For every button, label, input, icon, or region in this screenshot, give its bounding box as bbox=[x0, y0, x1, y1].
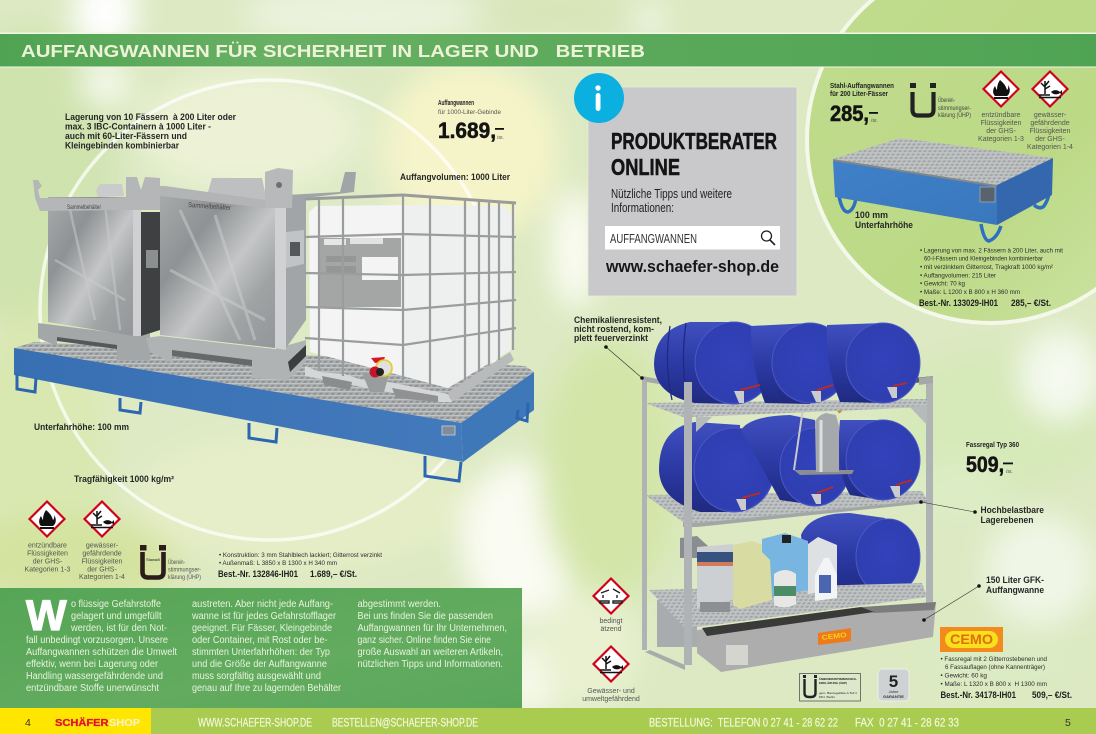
caption: corrosive: bedingt bbox=[600, 618, 623, 625]
rack front post bbox=[684, 382, 692, 665]
caption: environment hazard bbox=[582, 688, 640, 703]
CEMO tray label: CEMO bbox=[821, 632, 848, 642]
panel: product advisor online bbox=[574, 73, 797, 296]
white canister bbox=[808, 537, 837, 594]
leader: GFK tray: Auffangwanne bbox=[986, 585, 1044, 595]
container one body: Sammelbehälter bbox=[67, 205, 101, 211]
caption: water hazard left bbox=[79, 542, 125, 581]
caption: flammable left: Kategorien 1-3 bbox=[25, 566, 71, 574]
leader: corrosion resistant: nicht rostend, kom- bbox=[574, 324, 654, 334]
price: drum rack: 509, bbox=[966, 452, 1004, 477]
text block: spec left: • Außenmaß: L 3850 x B 1300 x H 340 mm bbox=[219, 560, 337, 567]
IBC valve bbox=[362, 357, 392, 392]
icon: conformity box: DIN, Berlin bbox=[819, 695, 835, 699]
text column two: geeignet. Für Fässer, Kleingebinde bbox=[192, 623, 332, 634]
middle shelf bbox=[645, 491, 927, 523]
text column one: o flüssige Gefahrstoffe bbox=[71, 599, 161, 610]
advisor url: www.schaefer-shop.de bbox=[605, 257, 779, 276]
text column one: fall unbedingt vorzusorgen. Unsere bbox=[26, 635, 168, 646]
icon: CEMO logo: CEMO bbox=[950, 631, 993, 647]
text block: spec drum rack: Best.-Nr. 34178-IH01 bbox=[940, 690, 1016, 700]
search box bbox=[605, 226, 780, 250]
icon: five year warranty bbox=[878, 669, 909, 701]
caption: flammable left: Flüssigkeiten bbox=[27, 550, 68, 558]
text block: spec left: 1.689,– €/St. bbox=[310, 569, 357, 579]
icon: conformity box: ERKLÄRUNG (ÜHP) bbox=[819, 680, 847, 685]
middle row drums bbox=[659, 415, 920, 512]
caption: water hazard right: gefährdende bbox=[1030, 120, 1070, 127]
icon: five year warranty: Jahre bbox=[888, 689, 899, 694]
drop cap: W bbox=[26, 592, 67, 640]
text block: storage capacity: Kleingebinden kombinierbar bbox=[65, 140, 179, 150]
caption: water hazard right: Kategorien 1-4 bbox=[1027, 144, 1073, 151]
IBC pallet bbox=[305, 366, 452, 402]
oil can on holder bbox=[794, 404, 854, 475]
text block: storage capacity: auch mit 60-Liter-Fässern und bbox=[65, 131, 187, 141]
CEMO tray label bbox=[818, 628, 851, 645]
leader: GFK tray bbox=[922, 575, 1044, 622]
icon: conformity mark right: Überein- bbox=[938, 97, 955, 104]
logo: Schäfer Shop: SHOP bbox=[109, 717, 140, 729]
text block: storage capacity: max. 3 IBC-Containern à 1000 Liter - bbox=[65, 122, 211, 132]
text column two: und die Größe der Auffangwanne bbox=[192, 659, 327, 670]
footer website: WWW.SCHAEFER-SHOP.DE bbox=[198, 716, 312, 730]
price: 1000 litre tray: für 1000-Liter-Gebinde bbox=[438, 109, 501, 116]
text column two: genau auf Ihre zu lagernden Behälter bbox=[192, 683, 342, 694]
panel: green intro text bbox=[0, 588, 522, 708]
metal can bbox=[680, 536, 733, 612]
label: clearance right: Unterfahrhöhe bbox=[855, 220, 913, 230]
page number right: 5 bbox=[1065, 717, 1071, 729]
caption: water hazard right: Flüssigkeiten bbox=[1030, 128, 1071, 135]
text block: spec right top: • Gewicht: 70 kg bbox=[920, 280, 965, 288]
decorative ring around left product bbox=[40, 80, 500, 540]
icon: info circle bbox=[574, 73, 624, 123]
bottom shelf and drum bbox=[649, 513, 927, 647]
price: 200 litre tray: /St. bbox=[871, 118, 878, 123]
text block: spec drum rack: • Maße: L 1320 x B 800 x H 1300 mm bbox=[940, 681, 1047, 688]
icon: conformity box: gem. Bauregelliste A Teil 1 bbox=[819, 691, 857, 695]
container two body bbox=[160, 168, 356, 350]
caption: water hazard left: gefährdende bbox=[82, 550, 122, 558]
text column three: große Auswahl an weiteren Artikeln, bbox=[358, 647, 503, 658]
price: 1000 litre tray: /St. bbox=[497, 135, 504, 140]
text block: spec drum rack bbox=[940, 656, 1072, 700]
caption: flammable left bbox=[25, 542, 71, 574]
price: 200 litre tray: 285, bbox=[830, 101, 869, 126]
leader: corrosion resistant bbox=[574, 315, 662, 380]
icon: conformity mark left: klärung (ÜHP) bbox=[168, 574, 201, 581]
container one pallet bbox=[38, 323, 150, 360]
price: 200 litre tray: Stahl-Auffangwannen bbox=[830, 83, 894, 90]
text block: spec drum rack: • Fassregal mit 2 Gitterrostebenen und bbox=[940, 656, 1047, 663]
text block: spec left bbox=[218, 552, 382, 579]
text column one: entzündbare Stoffe unerwünscht bbox=[26, 683, 159, 694]
text column two: austreten. Aber nicht jede Auffang- bbox=[192, 599, 333, 610]
leader: shelf levels: Hochbelastbare bbox=[980, 505, 1044, 515]
text block: spec right top: • Maße: L 1200 x B 800 x H 360 mm bbox=[920, 289, 1020, 296]
text column three bbox=[358, 599, 507, 670]
text column one: effektiv, wenn bei Lagerung oder bbox=[26, 659, 159, 670]
text block: spec right top: • Lagerung von max. 2 Fässern à 200 Liter, auch mit bbox=[920, 248, 1063, 254]
footer fax: FAX 0 27 41 - 28 62 33 bbox=[855, 716, 959, 730]
text block: spec drum rack: 509,– €/St. bbox=[1032, 690, 1072, 700]
caption: environment hazard: umweltgefährdend bbox=[582, 696, 640, 703]
product photo: IBC collecting tray with containers bbox=[14, 168, 534, 481]
icon: conformity mark right: stimmungser- bbox=[938, 106, 971, 112]
label: load capacity: Tragfähigkeit 1000 kg/m² bbox=[74, 474, 174, 484]
text column two: wanne ist für jedes Gefahrstofflager bbox=[191, 611, 337, 622]
tray grating bbox=[14, 342, 534, 423]
advisor heading bbox=[611, 128, 777, 180]
product photo: drum rack bbox=[642, 322, 936, 672]
label: clearance right: 100 mm bbox=[855, 210, 888, 220]
caption: water hazard right: gewässer- bbox=[1034, 112, 1067, 119]
text block: spec right top: • Auffangvolumen: 215 Liter bbox=[920, 272, 997, 280]
advisor text: Nützliche Tipps und weitere bbox=[611, 187, 732, 201]
page number left: 4 bbox=[25, 717, 31, 729]
icon: conformity box: ÜBEREINSTIMMUNGS- bbox=[819, 676, 857, 681]
caption: environment hazard: Gewässer- und bbox=[587, 688, 635, 695]
text column one bbox=[26, 599, 177, 694]
advisor text: Informationen: bbox=[611, 201, 674, 215]
text column two: muss sorgfältig ausgewählt und bbox=[192, 671, 321, 682]
text column three: ganz sicher. Online finden Sie eine bbox=[358, 635, 491, 646]
IBC cage bbox=[305, 195, 516, 386]
caption: flammable right: Kategorien 1-3 bbox=[978, 136, 1024, 143]
text block: spec right top bbox=[919, 248, 1063, 308]
leader: corrosion resistant: Chemikalienresistent, bbox=[574, 315, 662, 325]
price: drum rack: /St. bbox=[1006, 469, 1013, 474]
text column one: Auffangwannen schützen die Umwelt bbox=[26, 647, 177, 658]
text column one: gelagert und umgefüllt bbox=[71, 611, 162, 622]
rack rear posts bbox=[642, 376, 933, 670]
logo: Schäfer Shop: SCHÄFER bbox=[55, 716, 109, 729]
text block: spec left: Best.-Nr. 132846-IH01 bbox=[218, 569, 298, 579]
leader: corrosion resistant: plett feuerverzinkt bbox=[574, 333, 648, 343]
icon: conformity mark left bbox=[140, 545, 201, 581]
leader: GFK tray: 150 Liter GFK- bbox=[986, 575, 1044, 585]
text column three: Auffangwannen für Ihr Unternehmen, bbox=[358, 623, 507, 634]
price: drum rack bbox=[966, 442, 1019, 477]
icon: five year warranty: GARANTIE bbox=[883, 694, 904, 699]
text column three: abgestimmt werden. bbox=[358, 599, 441, 610]
title: AUFFANGWANNEN FÜR SICHERHEIT IN LAGER UND BETRIEB bbox=[21, 41, 645, 61]
white bottle bbox=[815, 558, 837, 601]
leader: shelf levels bbox=[919, 500, 1044, 525]
caption: water hazard right: der GHS- bbox=[1035, 136, 1065, 143]
caption: flammable right bbox=[978, 112, 1024, 143]
product photo: 200 litre blue tray bbox=[833, 138, 1053, 241]
icon: GHS environment right bbox=[1032, 72, 1068, 106]
panel: top right green circle bbox=[807, 0, 1096, 323]
logo: Schäfer Shop bbox=[55, 716, 140, 729]
icon: conformity box bbox=[800, 674, 860, 701]
footer email: BESTELLEN@SCHAEFER-SHOP.DE bbox=[332, 716, 478, 730]
text block: spec right top: 285,– €/St. bbox=[1011, 298, 1051, 308]
text column two bbox=[191, 599, 342, 694]
icon: five year warranty: 5 bbox=[889, 672, 898, 691]
footer bar bbox=[0, 708, 1096, 734]
caption: water hazard left: Flüssigkeiten bbox=[82, 558, 123, 566]
text block: spec right top: • mit verzinktem Gitterrost, Tragkraft 1000 kg/m² bbox=[920, 264, 1054, 271]
IBC plastic container bbox=[305, 195, 516, 402]
rack top rail right bbox=[919, 376, 933, 385]
advisor heading: ONLINE bbox=[611, 154, 680, 180]
caption: flammable left: entzündbare bbox=[28, 542, 67, 550]
text column one: werden, ist für den Not- bbox=[70, 623, 167, 634]
text block: spec drum rack: 6 Fassauflagen (ohne Kannenträger) bbox=[945, 664, 1045, 671]
blue canister bbox=[762, 533, 808, 597]
text column two: stimmten Unterfahrhöhen: der Typ bbox=[192, 647, 330, 658]
caption: water hazard right bbox=[1027, 112, 1073, 151]
icon: conformity mark left: stimmungser- bbox=[168, 568, 201, 574]
icon: conformity mark left: Stawa/li bbox=[146, 557, 160, 562]
caption: flammable right: der GHS- bbox=[986, 128, 1016, 135]
icon: conformity mark right: klärung (ÜHP) bbox=[938, 112, 971, 119]
tray blue front face bbox=[14, 348, 463, 462]
icon: GHS flame left bbox=[30, 502, 64, 536]
leader: shelf levels: Lagerebenen bbox=[980, 515, 1034, 525]
feet bbox=[839, 194, 1049, 241]
small containers bbox=[680, 533, 837, 612]
label: clearance right bbox=[855, 210, 913, 230]
tray type plate bbox=[442, 426, 455, 435]
text block: spec right top: 60-l-Fässern und Kleingebinden kombinierbar bbox=[924, 256, 1044, 262]
caption: water hazard left: gewässer- bbox=[86, 542, 119, 550]
yellow canister bbox=[733, 541, 772, 609]
icon: GHS corrosive bbox=[594, 578, 628, 614]
text column three: Bei uns finden Sie die passenden bbox=[358, 611, 493, 622]
icon: GHS environment left bbox=[84, 502, 120, 536]
caption: corrosive bbox=[600, 618, 623, 633]
container two body: Sammelbehälter bbox=[188, 202, 232, 212]
caption: flammable right: Flüssigkeiten bbox=[981, 120, 1022, 127]
caption: corrosive: ätzend bbox=[600, 626, 622, 633]
text block: storage capacity bbox=[65, 112, 236, 150]
header band bbox=[0, 32, 1096, 68]
icon: CEMO logo bbox=[940, 627, 1003, 652]
price: 1000 litre tray bbox=[438, 100, 504, 143]
price: 200 litre tray: für 200 Liter-Fässer bbox=[830, 91, 888, 98]
text block: spec right top: Best.-Nr. 133029-IH01 bbox=[919, 298, 998, 308]
label panel bbox=[320, 238, 401, 307]
label: clearance height: Unterfahrhöhe: 100 mm bbox=[34, 422, 129, 432]
round tin bbox=[774, 570, 796, 607]
top shelf bbox=[645, 399, 927, 417]
caption: flammable left: der GHS- bbox=[33, 558, 63, 566]
GFK collecting tray bbox=[697, 602, 936, 672]
search box: AUFFANGWANNEN bbox=[610, 232, 697, 246]
text block: storage capacity: Lagerung von 10 Fässern à 200 Liter oder bbox=[65, 112, 236, 122]
footer phone: BESTELLUNG: TELEFON 0 27 41 - 28 62 22 bbox=[649, 716, 838, 730]
container one body bbox=[33, 177, 160, 336]
price: 1000 litre tray: 1.689, bbox=[438, 118, 496, 143]
icon: GHS flame right bbox=[984, 72, 1018, 106]
price: drum rack: Fassregal Typ 360 bbox=[966, 442, 1019, 449]
text column three: nützlichen Tipps und Informationen. bbox=[358, 659, 503, 670]
text block: spec left: • Konstruktion: 3 mm Stahlblech lackiert; Gitterrost verzinkt bbox=[219, 552, 382, 559]
price: 1000 litre tray: Auffangwannen bbox=[438, 100, 474, 107]
text column one: Handling wassergefährdende und bbox=[26, 671, 163, 682]
text column two: oder Container, mit Rost oder be- bbox=[192, 635, 328, 646]
advisor text bbox=[611, 187, 732, 215]
advisor heading: PRODUKTBERATER bbox=[611, 128, 777, 154]
icon: conformity mark right bbox=[910, 83, 971, 119]
icon: GHS environment rack bbox=[594, 646, 628, 682]
label: collecting volume: Auffangvolumen: 1000 Liter bbox=[400, 172, 510, 182]
tray feet bbox=[17, 375, 528, 481]
caption: water hazard left: der GHS- bbox=[87, 566, 117, 574]
caption: flammable right: entzündbare bbox=[982, 112, 1021, 119]
price: 200 litre tray bbox=[830, 83, 894, 126]
caption: water hazard left: Kategorien 1-4 bbox=[79, 574, 125, 581]
text block: spec drum rack: • Gewicht: 60 kg bbox=[940, 672, 987, 680]
icon: conformity mark left: Überein- bbox=[168, 559, 185, 566]
container two pallet bbox=[146, 336, 306, 380]
top row drums bbox=[654, 322, 920, 404]
